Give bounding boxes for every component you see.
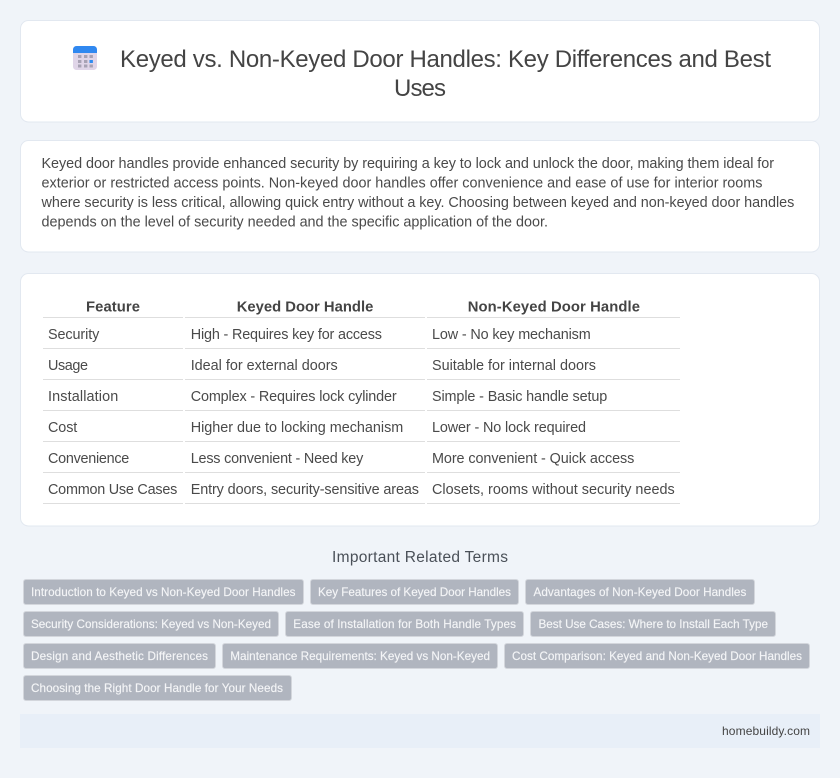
tag [310,580,518,604]
tag [504,644,810,668]
tag: Security Considerations: Keyed vs Non-Keyed [31,618,271,631]
table row: usage: Suitable for internal doors [432,358,596,374]
tag: Ease of Installation for Both Handle Types [293,618,516,631]
table row: security: Security [48,327,100,343]
icon: calendar [73,46,97,70]
table row: cost: Higher due to locking mechanism [191,420,403,436]
tag: Design and Aesthetic Differences [31,650,208,663]
table row: security: High - Requires key for access [191,327,382,343]
table row: cost [43,420,680,442]
footer: homebuildy.com [722,724,810,738]
text block: summary: Keyed door handles provide enhanced security by requiring a key to lock and unlock the door, making them ideal for [42,156,774,172]
table row: installation: Complex - Requires lock cylinder [191,389,397,405]
tag [530,612,776,636]
table row: installation: Installation [48,389,118,405]
table row: installation: Simple - Basic handle setup [432,389,607,405]
heading: related terms: Important Related Terms [332,549,508,566]
table row: common use cases: Common Use Cases [48,482,177,498]
table row: installation [43,389,680,411]
text block: summary: exterior or restricted access points. Non-keyed door handles offer convenience and ease of use for interior rooms [42,176,762,192]
table header row: Non-Keyed Door Handle [468,300,640,316]
title [120,46,771,102]
table row: common use cases: Entry doors, security-sensitive areas [191,482,419,498]
footer [20,714,820,748]
tag [222,644,498,668]
table row: convenience [43,451,680,473]
tag: Introduction to Keyed vs Non-Keyed Door Handles [31,586,296,599]
tag: Best Use Cases: Where to Install Each Type [538,618,768,631]
table row: convenience: Less convenient - Need key [191,451,364,467]
tag [24,612,278,636]
title: Uses [394,75,446,102]
table row: convenience: Convenience [48,451,129,467]
tag [24,580,304,604]
tag [24,676,292,700]
title: Keyed vs. Non-Keyed Door Handles: Key Differences and Best [120,46,771,73]
table row: cost: Cost [48,420,77,436]
tag [24,644,216,668]
table header row: Keyed Door Handle [237,300,373,316]
panel: comparison table [20,274,820,526]
text block: summary: depends on the level of security needed and the specific application of the door. [42,214,548,230]
table row: usage [43,358,680,380]
tag: Choosing the Right Door Handle for Your Needs [31,682,283,695]
tag [286,612,524,636]
panel: summary paragraph [20,140,820,252]
text block: summary [40,156,794,230]
tag: Advantages of Non-Keyed Door Handles [534,586,746,599]
table row: common use cases [43,482,680,504]
tag: Cost Comparison: Keyed and Non-Keyed Door Handles [512,650,802,663]
table header row [43,300,680,318]
tag [526,580,754,604]
header panel [20,20,820,122]
table row: cost: Lower - No lock required [432,420,586,436]
text block: summary: where security is less critical, allowing quick entry without a key. Choosing between keyed and non-keyed door handles [40,195,794,211]
table row: security: Low - No key mechanism [432,327,591,343]
table row: common use cases: Closets, rooms without security needs [432,482,675,498]
related terms tags [24,580,810,700]
table row: usage: Usage [48,358,88,374]
tag: Maintenance Requirements: Keyed vs Non-Keyed [230,650,490,663]
table row: convenience: More convenient - Quick access [432,451,634,467]
table row: security [43,327,680,349]
table header row: Feature [86,300,140,316]
tag: Key Features of Keyed Door Handles [318,586,511,599]
table row: usage: Ideal for external doors [191,358,338,374]
